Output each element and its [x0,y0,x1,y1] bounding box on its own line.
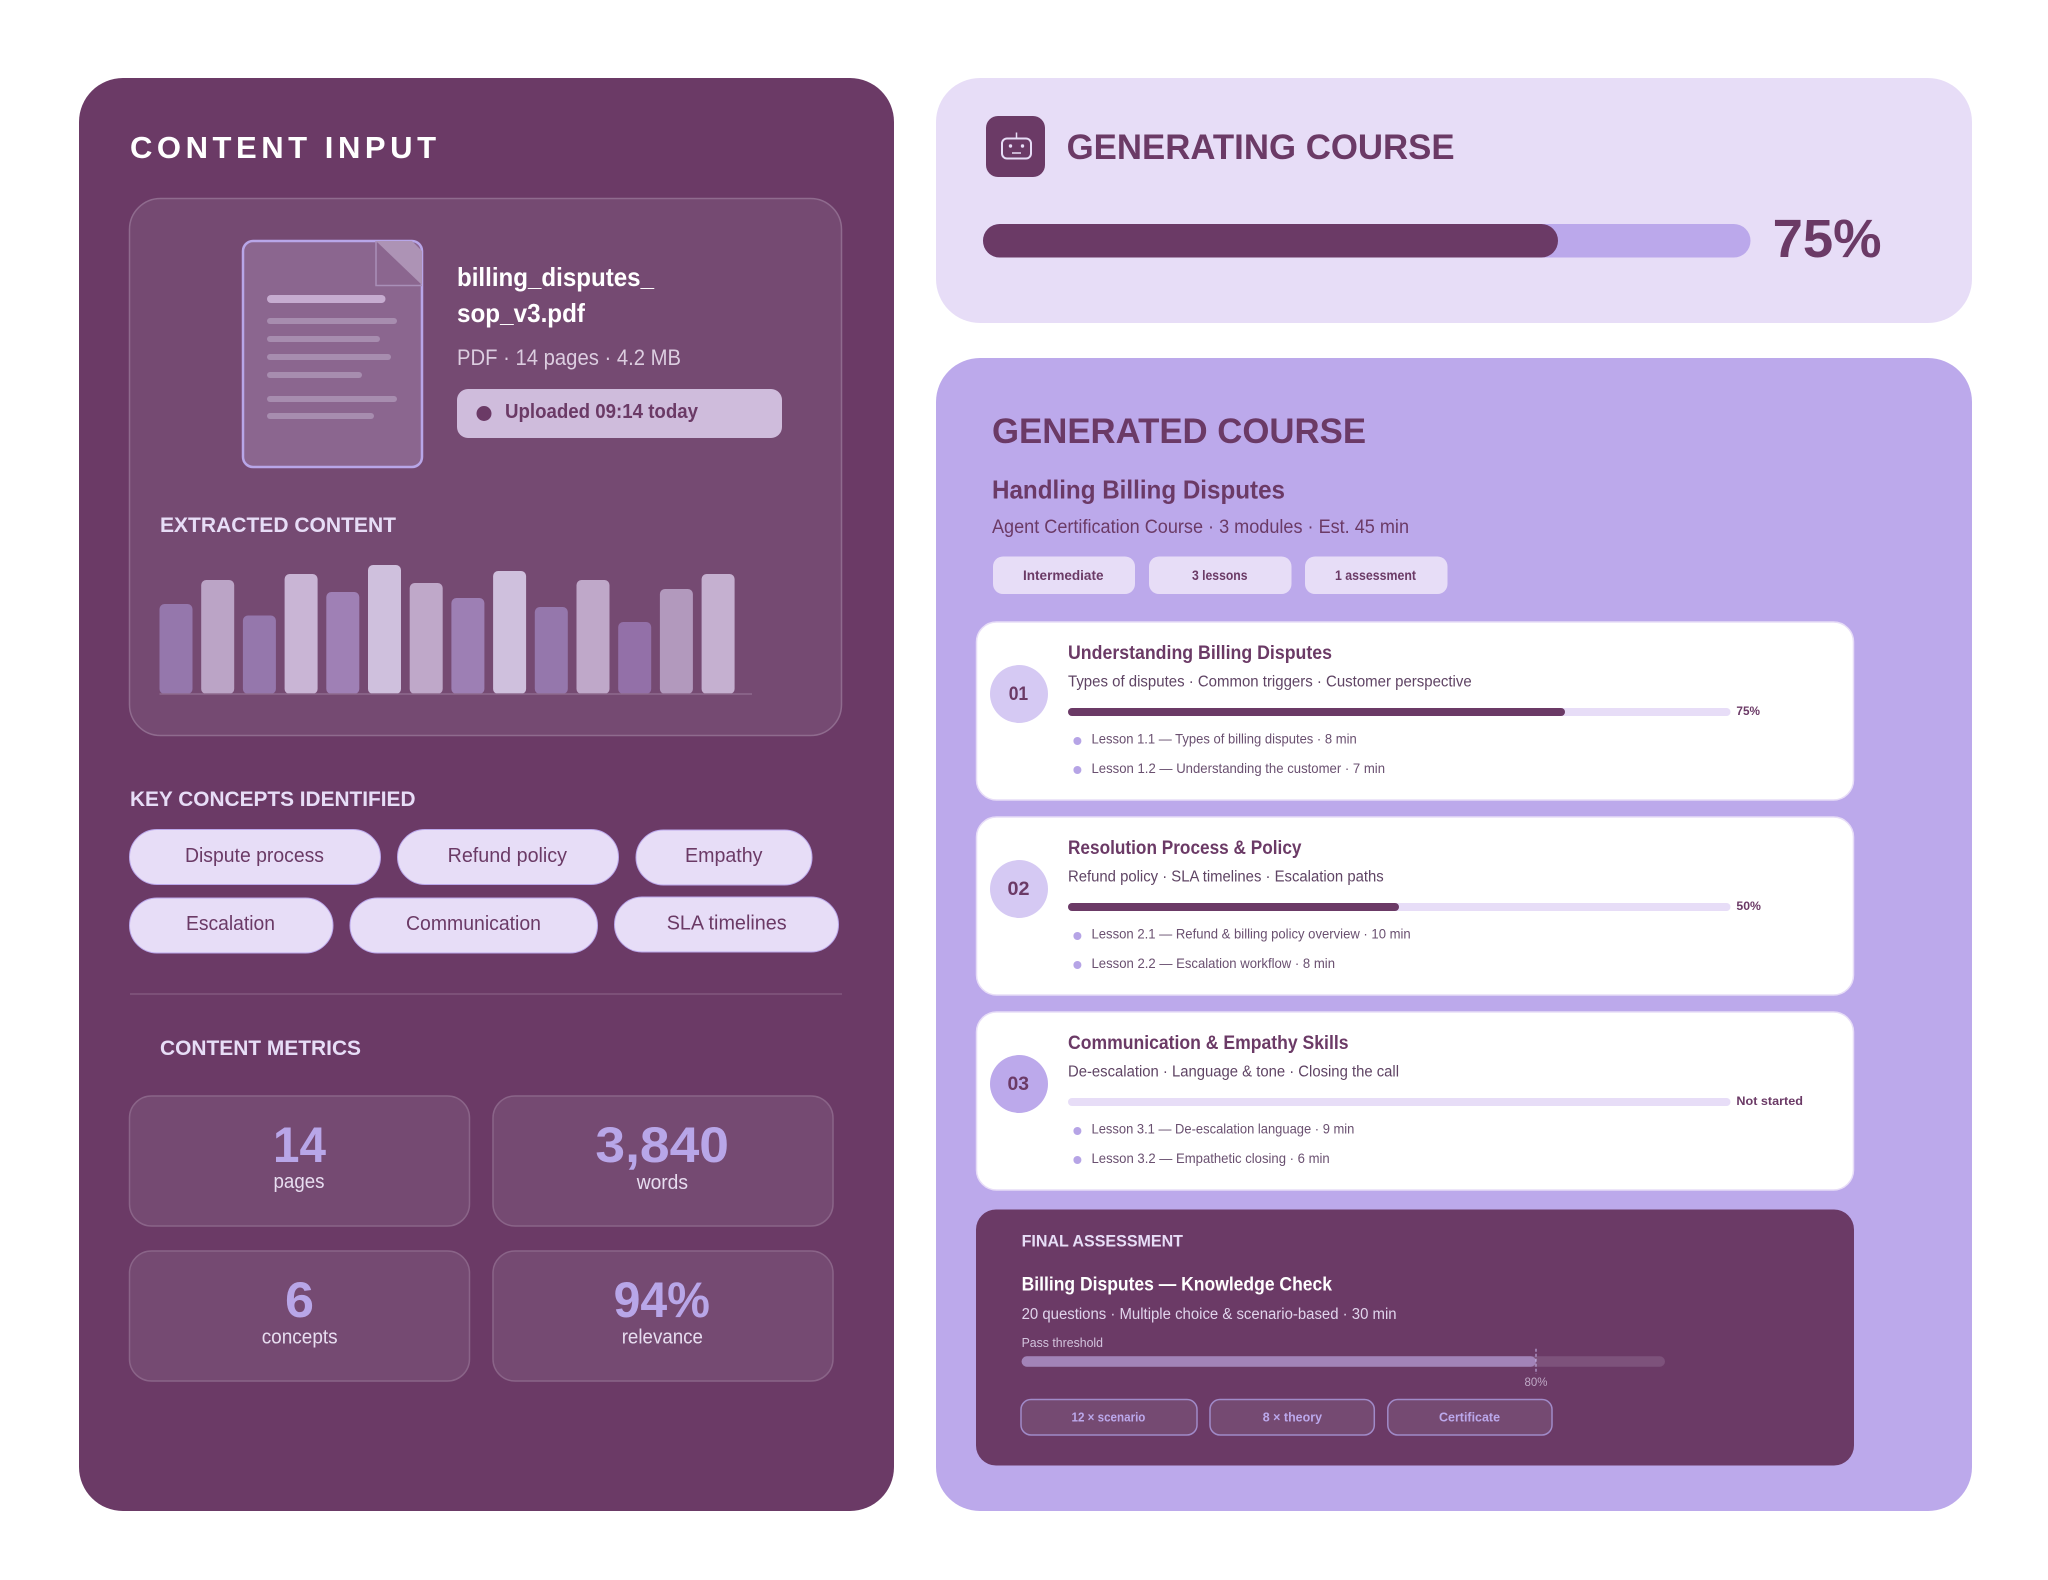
module 01 lessons: Lesson 1.1 — Types of billing disputes · 8 min [1092,730,1357,746]
concept pills: SLA timelines [667,912,787,934]
metric: relevance: relevance [622,1326,703,1348]
assessment chips: 12 × scenario [1072,1410,1145,1424]
panel: generated course [936,358,1972,1511]
module 01 lessons: Lesson 1.2 — Understanding the customer · 7 min [1092,760,1385,776]
concept pills: Empathy [685,845,762,867]
metric: relevance [493,1251,833,1381]
course title: Handling Billing Disputes [992,474,1285,504]
course tags [993,556,1448,594]
module 03 progress: Not started [1736,1094,1803,1108]
metric: concepts [130,1251,470,1381]
concept pills: Communication [406,913,541,935]
overall progress bar [983,224,1750,258]
module 01 progress: 75% [1736,704,1760,718]
module card 01 [976,622,1854,800]
module 02 progress: 50% [1736,899,1761,913]
concept pills: Refund policy [448,845,567,867]
module card 02: Resolution Process & Policy [1068,838,1302,859]
module card 02 [976,817,1854,995]
assessment chips: Certificate [1439,1410,1500,1424]
module 03 lessons: Lesson 3.1 — De-escalation language · 9 min [1092,1120,1354,1136]
metric: words [493,1096,833,1226]
file details: PDF · 14 pages · 4.2 MB [457,345,681,370]
metric: words: 3,840 [595,1117,729,1173]
heading: generating course: GENERATING COURSE [1067,128,1455,167]
module card 01: Types of disputes · Common triggers · Customer perspective [1068,674,1472,690]
metric: pages [130,1096,470,1226]
card: uploaded file and extracted content [130,198,842,736]
course tags: 1 assessment [1335,567,1416,583]
assessment chips: 8 × theory [1263,1410,1323,1424]
metric: concepts: concepts [262,1326,338,1348]
bar chart: extracted content [160,565,752,694]
heading: key concepts identified: KEY CONCEPTS IDENTIFIED [130,788,416,811]
module card 02: Refund policy · SLA timelines · Escalation paths [1068,868,1384,886]
concept pills [130,830,838,953]
assessment chips [1021,1400,1552,1435]
module number 03: 03 [1008,1074,1029,1095]
upload status badge: Uploaded 09:14 today [505,401,699,423]
panel: generating course [936,78,1972,323]
module 02 progress [1068,899,1761,913]
heading: content input: CONTENT INPUT [130,130,436,165]
module card 03 [976,1012,1854,1190]
icon: robot [986,116,1045,177]
metric: relevance: 94% [614,1272,710,1328]
card: final assessment: Billing Disputes — Knowledge Check [1022,1274,1332,1296]
heading: content metrics: CONTENT METRICS [160,1037,361,1060]
metric: words: words [636,1172,688,1194]
module number 02 [990,860,1048,918]
file name: billing_disputes_ [457,262,654,292]
module number 01 [990,665,1048,723]
module card 01: Understanding Billing Disputes [1068,643,1332,664]
module 01 lessons [1073,730,1385,776]
card: final assessment: FINAL ASSESSMENT [1022,1232,1184,1250]
pass threshold bar: 80% [1524,1375,1548,1389]
module 01 progress [1068,704,1760,718]
card: final assessment [976,1210,1854,1466]
metric: pages: 14 [273,1117,326,1173]
module 03 lessons [1073,1120,1354,1166]
heading: generated course: GENERATED COURSE [992,412,1366,451]
module 03 progress [1068,1094,1803,1108]
course tags: Intermediate [1023,567,1104,583]
module 03 lessons: Lesson 3.2 — Empathetic closing · 6 min [1092,1150,1330,1166]
progress value: 75% [1773,209,1882,269]
concept pills: Dispute process [185,845,324,867]
card: final assessment: 20 questions · Multiple choice & scenario-based · 30 min [1022,1306,1397,1323]
module number 01: 01 [1009,684,1029,705]
heading: extracted content: EXTRACTED CONTENT [160,514,396,537]
module number 02: 02 [1008,879,1030,900]
module card 03: De-escalation · Language & tone · Closing the call [1068,1064,1399,1080]
pass threshold bar [1022,1349,1665,1389]
file name [457,262,654,328]
concept pills: Escalation [186,913,275,935]
icon: document [243,241,422,467]
module number 03 [990,1055,1048,1113]
module 02 lessons: Lesson 2.1 — Refund & billing policy overview · 10 min [1092,926,1411,942]
course details: Agent Certification Course · 3 modules · Est. 45 min [992,517,1409,538]
upload status badge [457,389,782,438]
panel: content input [79,78,894,1511]
course tags: 3 lessons [1192,567,1248,583]
card: final assessment: Pass threshold [1022,1335,1103,1350]
file name: sop_v3.pdf [457,298,585,328]
module 02 lessons [1073,926,1411,971]
metric: concepts: 6 [285,1272,314,1328]
module card 03: Communication & Empathy Skills [1068,1033,1348,1054]
metric: pages: pages [274,1171,324,1193]
module 02 lessons: Lesson 2.2 — Escalation workflow · 8 min [1092,955,1335,971]
